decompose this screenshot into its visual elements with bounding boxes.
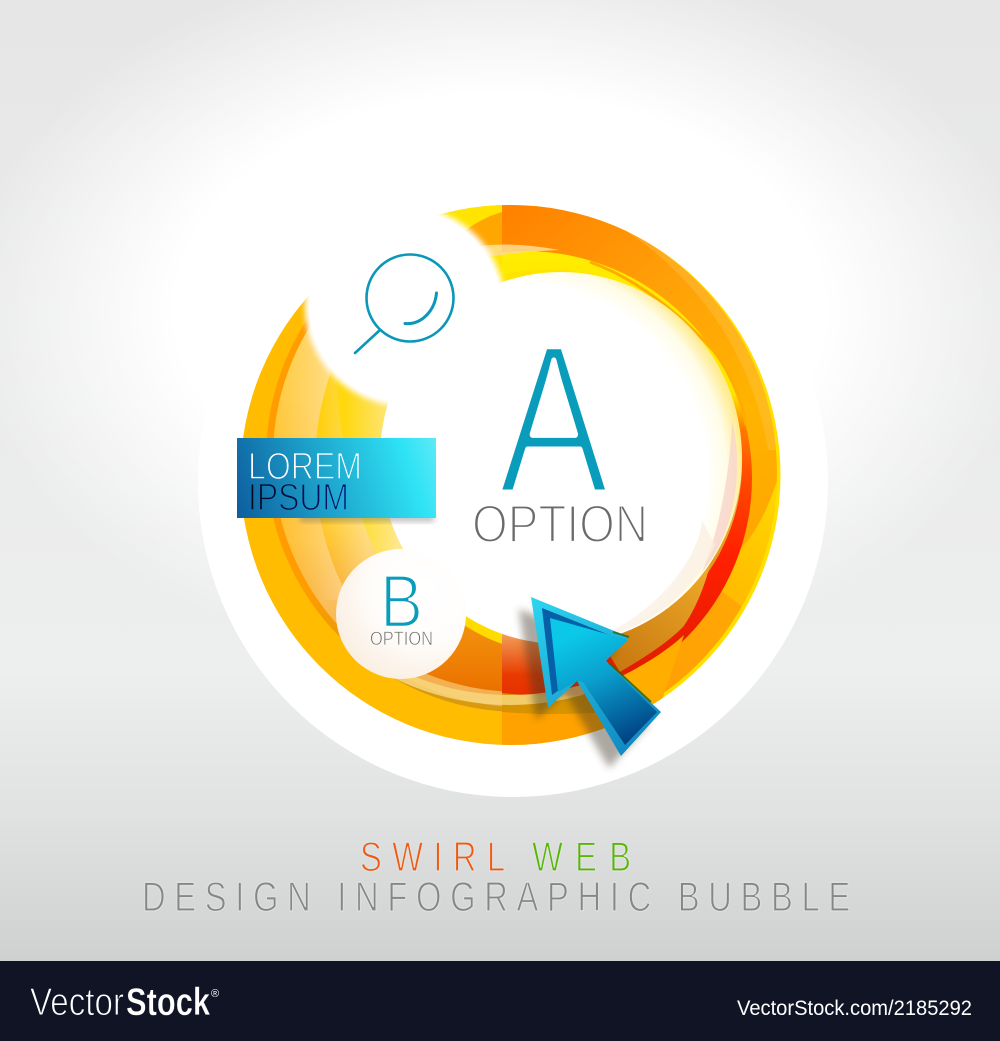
footer url: VectorStock.com/2185292 [737, 996, 972, 1020]
lower option B bubble [336, 549, 466, 679]
ring: left half bands [243, 205, 502, 745]
title [142, 833, 850, 920]
title line 1: SWIRL WEB: WEB [532, 833, 631, 880]
ring: top pale streak [480, 244, 560, 256]
title line 1: SWIRL WEB [360, 833, 631, 880]
arrow green outline details [609, 632, 651, 702]
ribbon text IPSUM: IPSUM [248, 477, 349, 519]
icon: magnifier [355, 254, 454, 353]
ribbon text LOREM: LOREM [248, 446, 362, 488]
letter A: A [498, 299, 609, 539]
upper magnifier bubble [305, 206, 505, 406]
footer logo [30, 981, 219, 1024]
ribbon shadow [300, 514, 434, 522]
letter B: B [380, 559, 423, 643]
option B caption: OPTION [370, 628, 433, 650]
footer logo: Vector [30, 981, 124, 1024]
title line 2: DESIGN INFOGRAPHIC BUBBLE [142, 873, 850, 920]
arrow cursor [519, 597, 661, 768]
option A heading [472, 299, 648, 554]
central white blob [380, 272, 742, 644]
large white backing circle [198, 167, 828, 797]
ring: pale translucent lower band [395, 677, 585, 705]
option A caption: OPTION [472, 495, 648, 554]
swirl ring [243, 205, 780, 745]
ring: right half bands [502, 205, 780, 745]
arrow shadow [519, 609, 649, 768]
title line 1: SWIRL WEB: SWIRL [360, 833, 505, 880]
footer logo: Stock [126, 981, 210, 1024]
footer logo: ® [211, 988, 219, 1000]
blue ribbon label [237, 438, 436, 519]
footer bar [0, 961, 1000, 1041]
